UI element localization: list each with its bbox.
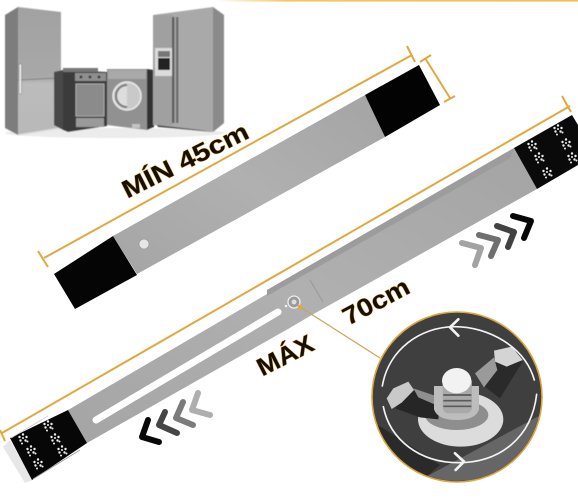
rotation arrows (382, 319, 537, 470)
floor shadow (5, 128, 225, 138)
label: MÁX: MÁX (252, 329, 319, 382)
maximum length dimension line (0, 96, 571, 441)
extended bar with slot (68, 148, 537, 443)
appliances photo (5, 7, 225, 138)
chevrons pointing right (462, 216, 531, 265)
minimum length dimension line (38, 46, 415, 267)
chevrons pointing left (142, 393, 210, 442)
bolt thread (443, 377, 472, 413)
nut body (434, 386, 479, 420)
bolt head (442, 368, 471, 393)
top gold strip (215, 0, 578, 2)
step shade (267, 148, 514, 296)
short bar (minimum length) (54, 65, 440, 309)
right pad with studs (514, 115, 578, 189)
oven (54, 68, 107, 132)
label: minimum length: MÍN 45cm (117, 117, 253, 204)
side by side fridge (153, 7, 224, 132)
bar body (113, 95, 385, 274)
left wing (395, 389, 440, 419)
label: 70cm: 70cm (338, 273, 415, 331)
left pad with studs (10, 410, 87, 480)
sliding slot (96, 312, 278, 420)
left fridge (5, 7, 61, 135)
left rubber pad (54, 236, 137, 309)
long bar (maximum length) (3, 115, 578, 483)
washer (418, 392, 503, 447)
detail circle: wing nut (371, 311, 543, 483)
rivet (139, 239, 149, 249)
width dimension line (420, 55, 455, 102)
leader line to detail (298, 305, 380, 358)
left shadow (3, 440, 33, 483)
wing nut on bar (285, 296, 300, 308)
washing machine (107, 69, 154, 130)
right wing (484, 360, 523, 398)
textured lower surface (428, 416, 539, 481)
right rubber pad (365, 65, 440, 137)
sleeve seam (310, 280, 323, 302)
